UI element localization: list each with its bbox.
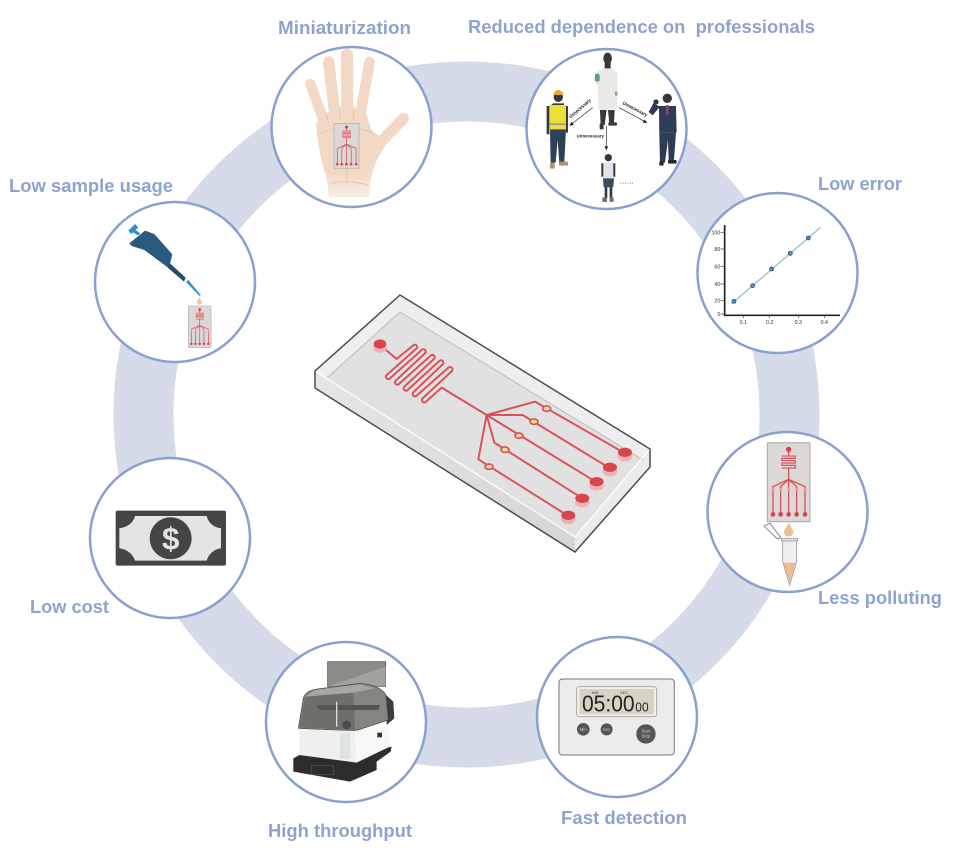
icon: chip with drop (767, 443, 810, 522)
heading: Low cost: Low cost (30, 597, 109, 617)
central microfluidic chip (315, 295, 650, 552)
icon: timer: 05:00 (582, 691, 635, 717)
chart: calibration line: 80 (714, 247, 720, 253)
icon: timer: Min (580, 727, 587, 732)
heading: Low sample usage: Low sample usage (9, 176, 173, 196)
chart: calibration line: 100 (711, 230, 720, 236)
heading: Less polluting: Less polluting (818, 588, 942, 608)
arrow labels (568, 98, 648, 186)
panel: low cost (90, 458, 250, 618)
icon: timer: SEC (620, 691, 628, 695)
chart: calibration line: 20 (714, 299, 720, 305)
chart: calibration line: 0.3 (795, 320, 802, 326)
icon: timer (559, 679, 674, 755)
arrow labels: Unnecessary (621, 100, 648, 119)
branch channels (478, 402, 625, 516)
arrows (570, 108, 647, 150)
chart: calibration line (711, 225, 840, 326)
icon: child (601, 154, 615, 202)
serpentine channel (380, 345, 487, 415)
ring background (144, 92, 790, 738)
panel: high throughput (266, 642, 426, 802)
chart: calibration line: 60 (714, 264, 720, 270)
icon: timer: Start (641, 729, 651, 734)
heading: Miniaturization: Miniaturization (278, 18, 411, 38)
icon: timer: 00 (635, 701, 649, 715)
panel: low error (698, 193, 858, 353)
arrow labels: ...... (620, 180, 634, 186)
panel: low sample usage (95, 202, 255, 362)
icon: banknote (116, 511, 226, 566)
panel: fast detection (537, 637, 697, 797)
icon: timer: Sec (603, 727, 611, 732)
icon: analysis instrument (293, 662, 394, 782)
chart: calibration line: 40 (714, 282, 720, 288)
icon: banknote: $ (162, 521, 179, 556)
arrow labels: Unnecessary (568, 98, 593, 120)
icon: businessman (649, 94, 677, 166)
panel: miniaturization (272, 47, 432, 207)
icon: small chip (188, 306, 211, 348)
icon: scientist (594, 53, 617, 129)
chart: calibration line: 0.1 (740, 320, 747, 326)
chart: calibration line: 0 (717, 312, 720, 318)
icon: timer: MIN (592, 691, 599, 695)
panel: less polluting (708, 432, 868, 592)
chart: calibration line: 0.2 (766, 320, 773, 326)
heading: Reduced dependence on professionals: Reduced dependence on professionals (468, 17, 815, 37)
arrow labels: Unnecessary (577, 133, 604, 139)
heading: High throughput: High throughput (268, 821, 412, 841)
icon: pipette (128, 224, 202, 305)
heading: Fast detection: Fast detection (561, 808, 687, 828)
icon: timer: Stop (642, 734, 651, 739)
icon: hand with chip (310, 55, 403, 197)
reservoirs (373, 339, 632, 524)
panel: reduced dependence on professionals (526, 49, 686, 209)
valves (485, 406, 551, 469)
chart: calibration line: 0.4 (821, 320, 828, 326)
icon: drop and sample tube (764, 523, 798, 585)
icon: construction worker (547, 90, 568, 169)
heading: Low error: Low error (818, 174, 902, 194)
